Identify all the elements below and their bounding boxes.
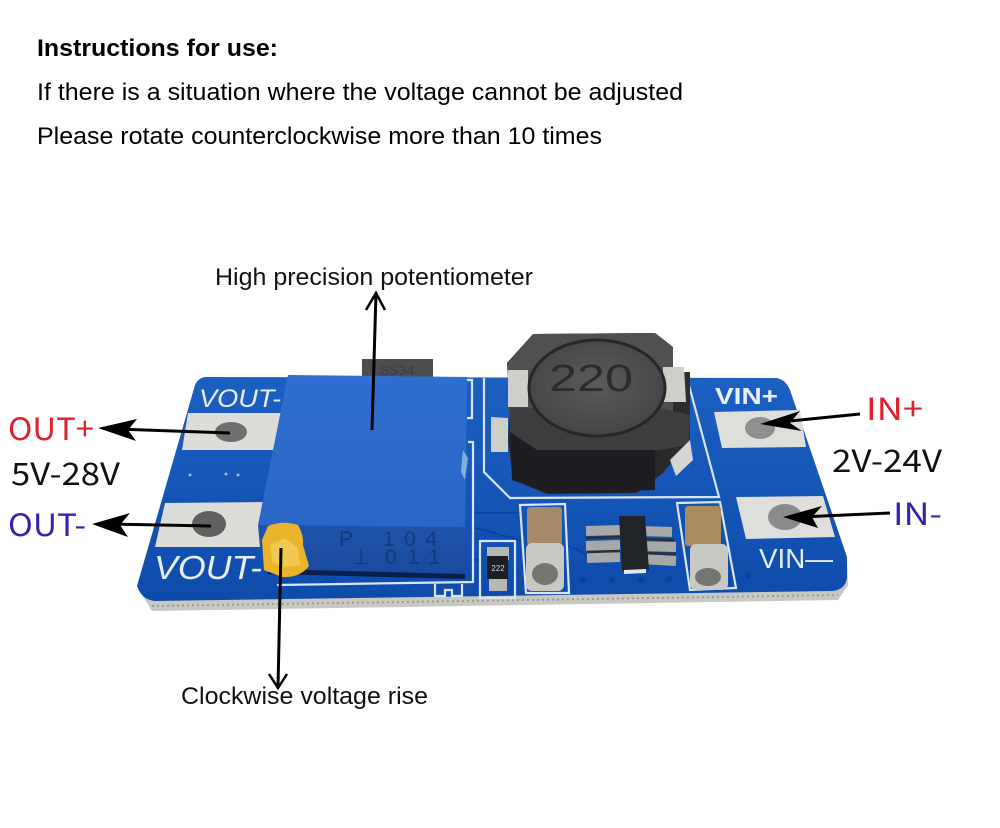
inductor 220: 220 <box>549 358 633 400</box>
pad OUT+ <box>182 413 285 450</box>
arrow: IN+ <box>760 411 860 431</box>
silk label VIN+: VIN+ <box>715 383 778 409</box>
resistor 222 <box>487 547 509 591</box>
arrow: to clockwise label <box>269 548 287 688</box>
potentiometer label: High precision potentiometer <box>215 264 533 291</box>
instructions heading: Instructions for use: <box>37 35 278 62</box>
circuit board module <box>137 333 848 611</box>
instruction line 2: Please rotate counterclockwise more than 10 times <box>37 123 602 150</box>
diode SS34: SS34 <box>380 362 414 378</box>
instructions text block <box>37 35 683 150</box>
chip SOT-23 <box>586 516 676 574</box>
OUT- label: OUT- <box>8 500 86 545</box>
potentiometer: 104 <box>383 528 437 551</box>
inductor 220 <box>491 333 693 494</box>
pad IN+ <box>714 410 806 448</box>
potentiometer: ⊥ <box>352 546 370 569</box>
IN- label: IN- <box>893 489 942 534</box>
PCB <box>137 377 847 601</box>
silk label VIN-: VIN— <box>759 543 833 574</box>
arrow: OUT+ <box>98 419 230 441</box>
pad IN- <box>736 496 835 539</box>
potentiometer <box>258 375 468 579</box>
clockwise label: Clockwise voltage rise <box>181 683 428 710</box>
adjustment screw <box>262 523 309 577</box>
output voltage label: 5V-28V <box>11 449 120 494</box>
IN+ label: IN+ <box>866 384 923 429</box>
OUT+ label: OUT+ <box>8 404 94 449</box>
instruction line 1: If there is a situation where the voltage cannot be adjusted <box>37 79 683 106</box>
diode SS34 <box>362 359 433 383</box>
board traces and vias <box>188 472 751 583</box>
arrow: to potentiometer label <box>366 293 385 430</box>
inductor terminals <box>508 367 686 407</box>
silk label VOUT- bottom: VOUT- <box>154 549 262 586</box>
capacitor left <box>526 507 564 591</box>
arrow: IN- <box>783 506 890 528</box>
board edge <box>137 557 848 611</box>
silkscreen outlines <box>277 378 736 598</box>
potentiometer: P <box>339 528 353 551</box>
input voltage label: 2V-24V <box>832 436 942 481</box>
potentiometer: 011 <box>385 546 440 569</box>
capacitor right <box>685 506 728 590</box>
arrow: OUT- <box>92 513 211 537</box>
resistor 222: 222 <box>491 564 505 573</box>
pad OUT- <box>155 502 265 547</box>
silk label VOUT+ top: VOUT- <box>199 385 281 413</box>
